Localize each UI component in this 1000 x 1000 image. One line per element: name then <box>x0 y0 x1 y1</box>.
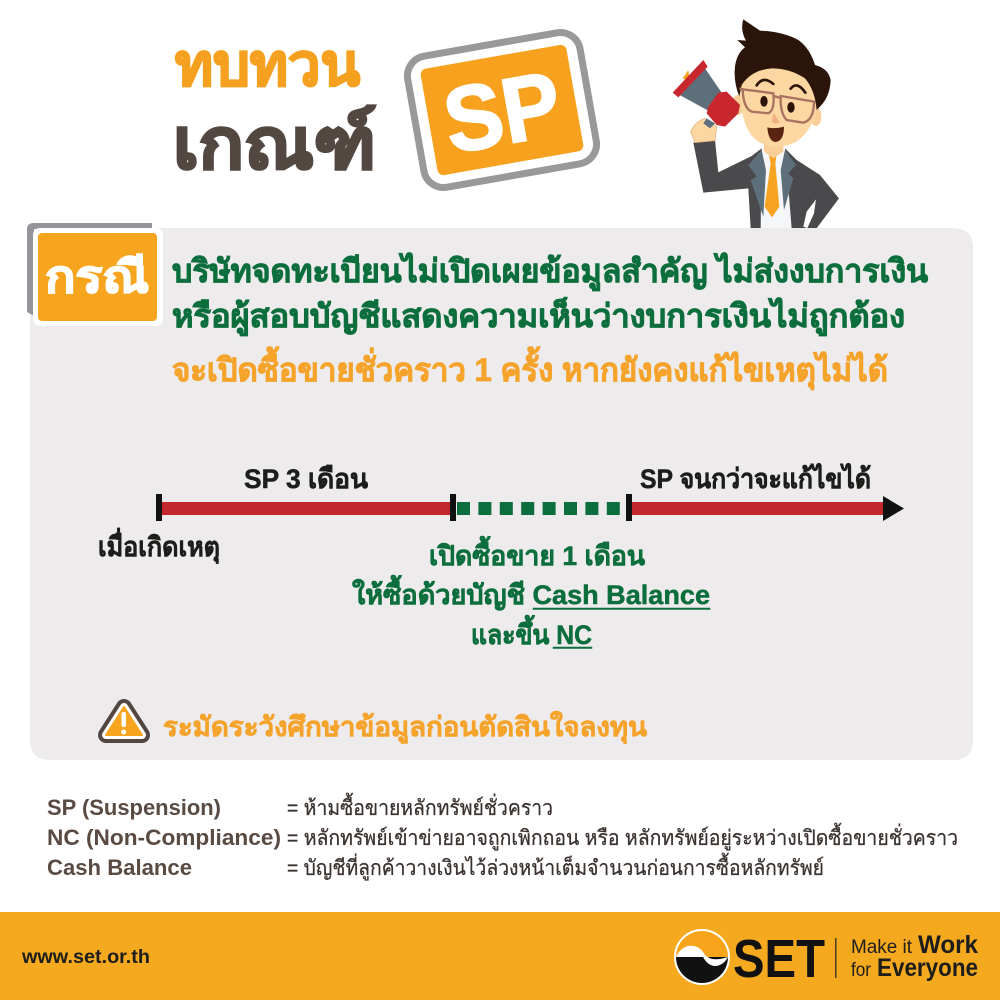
glasses <box>739 88 815 123</box>
hair <box>735 19 831 110</box>
tagline <box>851 931 978 982</box>
SP badge: SP <box>437 53 568 173</box>
hand <box>691 118 717 143</box>
SP badge <box>404 29 600 191</box>
glossary: NC (Non-Compliance) <box>47 825 281 850</box>
warning text: ระมัดระวังศึกษาข้อมูลก่อนตัดสินใจลงทุน <box>163 711 648 744</box>
icon: warning triangle <box>106 707 142 735</box>
panel: main case panel <box>27 223 973 760</box>
text block: case description: หรือผู้สอบบัญชีแสดงความเห็นว่างบการเงินไม่ถูกต้อง <box>172 296 905 337</box>
shirt <box>761 147 792 228</box>
text block: case description <box>172 252 928 391</box>
footer bar <box>0 912 1000 1000</box>
title: ทบทวน เกณฑ์: ทบทวน <box>175 33 360 98</box>
ears <box>732 95 744 115</box>
eyebrows <box>757 80 773 85</box>
timeline chart: เมื่อเกิดเหตุ <box>98 527 220 564</box>
neck <box>764 142 783 158</box>
callout: open for trading 1 month: เปิดซื้อขาย 1 เดือน <box>429 535 646 571</box>
title: ทบทวน เกณฑ์: เกณฑ์ <box>173 105 376 183</box>
SET logo: SET <box>733 929 825 989</box>
tab: กรณี: กรณี <box>45 253 149 302</box>
megaphone <box>673 60 740 128</box>
gap at hip <box>803 199 816 228</box>
timeline labels: SP 3 เดือน <box>244 464 369 494</box>
glossary: = หลักทรัพย์เข้าข่ายอาจถูกเพิกถอน หรือ หลักทรัพย์อยู่ระหว่างเปิดซื้อขายชั่วคราว <box>287 823 958 851</box>
timeline chart: SP จนกว่าจะแก้ไขได้ <box>640 463 871 494</box>
mouth <box>767 127 784 142</box>
title: ทบทวน เกณฑ์ <box>173 33 376 183</box>
text block: case description: บริษัทจดทะเบียนไม่เปิดเผยข้อมูลสำคัญ ไม่ส่งงบการเงิน <box>172 252 928 292</box>
website: www.set.or.th <box>21 947 150 968</box>
jacket and arms <box>693 140 839 228</box>
glossary: SP (Suspension) <box>47 795 221 820</box>
eyes <box>760 96 768 107</box>
timeline chart <box>98 463 904 564</box>
callout: open for trading 1 month <box>352 535 710 650</box>
face <box>740 65 817 147</box>
glossary: Cash Balance <box>47 855 192 880</box>
tagline: Work <box>918 931 978 959</box>
callout: open for trading 1 month: และขึ้น NC <box>471 614 592 650</box>
tagline: for <box>851 960 872 981</box>
glossary: = ห้ามซื้อขายหลักทรัพย์ชั่วคราว <box>287 793 553 820</box>
tie <box>765 153 779 217</box>
lapels <box>748 150 766 217</box>
tab: กรณี <box>27 223 163 326</box>
tagline: Make it <box>851 937 913 958</box>
SET logo <box>674 929 825 989</box>
nose <box>772 113 779 124</box>
tagline: Everyone <box>877 954 978 982</box>
icon: businessman with megaphone <box>673 19 839 228</box>
callout: open for trading 1 month: ให้ซื้อด้วยบัญชี Cash Balance <box>352 574 710 611</box>
glossary <box>47 793 958 881</box>
text block: case description: จะเปิดซื้อขายชั่วคราว 1 ครั้ง หากยังคงแก้ไขเหตุไม่ได้ <box>172 346 888 391</box>
divider <box>835 938 836 978</box>
glossary: = บัญชีที่ลูกค้าวางเงินไว้ล่วงหน้าเต็มจำนวนก่อนการซื้อหลักทรัพย์ <box>287 853 824 881</box>
